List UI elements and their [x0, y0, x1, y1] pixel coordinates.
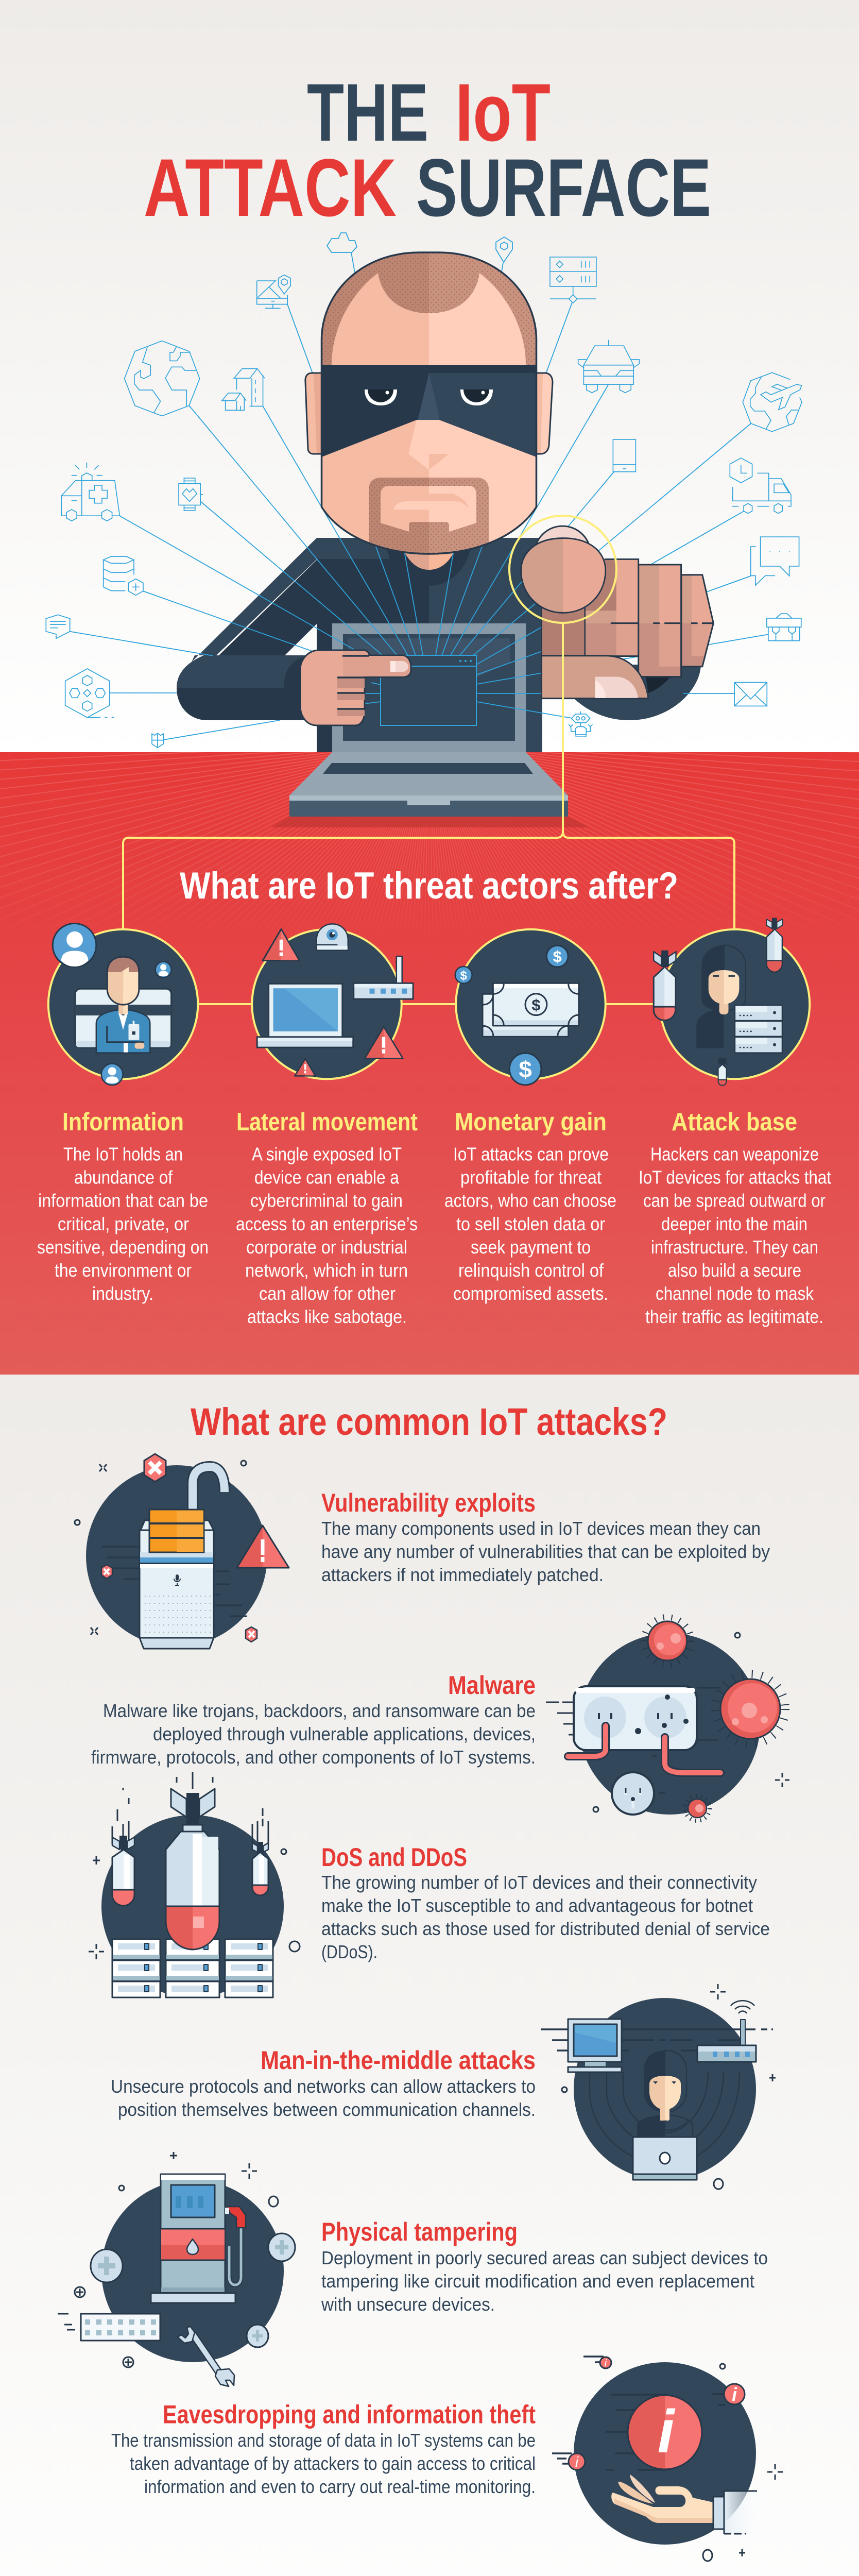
icon: wrench — [178, 2327, 234, 2386]
icon: tablet — [613, 439, 635, 472]
text block: DoS and DDoS: attacks such as those used for distributed denial of service — [321, 1918, 770, 1939]
icon: globe with plane — [743, 372, 802, 432]
circle: monetary gain: $ — [519, 1056, 532, 1082]
text block: monetary gain: Monetary gain — [455, 1108, 607, 1136]
text block: eavesdropping — [111, 2400, 536, 2497]
title: SURFACE — [416, 142, 711, 233]
bottom background — [0, 1375, 859, 2576]
text block: vulnerability exploits: Vulnerability exploits — [321, 1488, 536, 1517]
hacker torso and left arm — [177, 538, 542, 752]
icon: game controller hexagon — [65, 669, 114, 718]
icon: envelope — [734, 683, 767, 706]
icon: physical tampering fuel pump — [58, 2152, 295, 2386]
left hand on laptop — [300, 650, 411, 725]
icon: eavesdropping info hand — [552, 2357, 783, 2561]
text block: eavesdropping: taken advantage of by attackers to gain access to critical — [130, 2453, 536, 2474]
icon: eavesdropping info hand: i — [658, 2398, 676, 2466]
right arm — [575, 665, 701, 720]
icon: malware power strip with germs — [546, 1617, 789, 1821]
icon: chat bubbles — [751, 537, 799, 585]
circle: monetary gain: $ — [553, 947, 562, 965]
text block: monetary gain: IoT attacks can prove — [453, 1144, 609, 1164]
text block: man in the middle — [111, 2046, 536, 2120]
text block: monetary gain: compromised assets. — [453, 1283, 608, 1304]
nose shading — [408, 420, 449, 470]
text block: lateral movement: Lateral movement — [236, 1108, 418, 1136]
icon: robot — [569, 711, 592, 737]
icon: message bubble — [46, 615, 70, 638]
title — [144, 66, 711, 233]
text block: attack base: infrastructure. They can — [651, 1236, 818, 1258]
text block: attack base: deeper into the main — [661, 1213, 808, 1234]
text block: information: critical, private, or — [58, 1213, 189, 1234]
text block: man in the middle: position themselves between communication channels. — [118, 2099, 536, 2120]
icons right lower — [569, 537, 801, 737]
goatee — [369, 478, 489, 553]
text block: DoS and DDoS: The growing number of IoT devices and their connectivity — [321, 1872, 757, 1893]
laptop window — [381, 655, 476, 725]
icon: location pin — [496, 237, 512, 262]
title: ATTACK — [144, 142, 397, 233]
text block: physical tampering: Physical tampering — [321, 2217, 518, 2246]
yellow highlight circle and connector — [123, 516, 735, 1004]
threat actor goals text — [37, 1108, 831, 1327]
circle: monetary gain — [455, 929, 606, 1085]
text block: monetary gain: profitable for threat — [460, 1166, 602, 1188]
icon: cloud — [327, 233, 357, 252]
text block: monetary gain: relinquish control of — [458, 1260, 604, 1281]
text block: attack base: their traffic as legitimate. — [645, 1306, 823, 1327]
text block: vulnerability exploits — [321, 1488, 770, 1585]
icon: server — [550, 257, 596, 303]
text block: eavesdropping: Eavesdropping and information theft — [163, 2400, 536, 2429]
circle: attack base — [654, 918, 810, 1086]
connection lines from icons to laptop — [70, 252, 768, 740]
text block: malware — [91, 1671, 536, 1768]
text block: lateral movement: access to an enterprise’s — [236, 1213, 418, 1234]
icon: eavesdropping info hand: i — [575, 2454, 579, 2470]
text block: lateral movement: device can enable a — [254, 1166, 400, 1188]
icon: eavesdropping info hand: i — [605, 2358, 607, 2369]
top background — [0, 0, 859, 752]
text block: man in the middle: Man-in-the-middle attacks — [261, 2046, 536, 2075]
text block: information: industry. — [92, 1283, 153, 1304]
text block: monetary gain — [444, 1108, 616, 1304]
text block: attack base — [639, 1108, 831, 1327]
text block: monetary gain: actors, who can choose — [444, 1190, 616, 1211]
text block: lateral movement: cybercriminal to gain — [250, 1190, 403, 1211]
text block: vulnerability exploits: attackers if not immediately patched. — [321, 1564, 604, 1585]
text block: information: sensitive, depending on — [37, 1236, 209, 1258]
icon: vulnerability exploits speaker with padlock — [75, 1454, 289, 1649]
hacker head — [305, 252, 553, 562]
icon: delivery truck — [730, 458, 791, 513]
icon: ambulance — [61, 463, 119, 521]
text block: information: the environment or — [55, 1260, 192, 1281]
panel: threat icons — [48, 923, 413, 1085]
text block: attack base: channel node to mask — [656, 1283, 814, 1304]
icon: car — [578, 340, 639, 393]
icon: globe — [125, 341, 200, 416]
icons left top — [61, 275, 290, 521]
text block: lateral movement: can allow for other — [259, 1283, 396, 1304]
text block: information: information that can be — [38, 1190, 208, 1211]
icon: monitor with pin — [257, 275, 290, 308]
text block: vulnerability exploits: The many components used in IoT devices mean they can — [321, 1518, 761, 1539]
text block: attack base: IoT devices for attacks that — [639, 1166, 831, 1188]
text block: information: Information — [62, 1108, 184, 1136]
text block: malware: Malware like trojans, backdoors, and ransomware can be — [103, 1700, 536, 1721]
laptop base — [270, 752, 589, 827]
heading: threat actors: What are IoT threat actors after? — [180, 865, 678, 907]
server rack — [112, 1906, 273, 1997]
text block: eavesdropping: The transmission and storage of data in IoT systems can be — [111, 2430, 536, 2451]
text block: information: The IoT holds an — [63, 1144, 183, 1164]
icon: man in the middle hacker — [541, 1984, 776, 2189]
icon: smartwatch — [179, 478, 203, 511]
title: THE — [307, 66, 428, 158]
icon: houses — [222, 369, 265, 410]
circle: lateral movement — [252, 924, 413, 1079]
text block: lateral movement: network, which in turn — [245, 1260, 408, 1281]
text block: man in the middle: Unsecure protocols and networks can allow attackers to — [111, 2076, 536, 2097]
circle: monetary gain: $ — [531, 996, 541, 1014]
text block: physical tampering — [321, 2217, 768, 2315]
icons right top — [550, 257, 802, 513]
text block: DoS and DDoS: (DDoS). — [321, 1941, 377, 1962]
text block: lateral movement: A single exposed IoT — [252, 1144, 402, 1164]
right ear — [536, 373, 553, 454]
text block: eavesdropping: information and even to carry out real-time monitoring. — [144, 2476, 536, 2497]
icon: briefcase — [767, 614, 801, 641]
text block: monetary gain: seek payment to — [471, 1236, 591, 1258]
left ear — [305, 373, 322, 454]
text block: attack base: Attack base — [672, 1108, 797, 1136]
text block: attack base: Hackers can weaponize — [650, 1144, 819, 1164]
heading: common attacks: What are common IoT attacks? — [191, 1400, 667, 1443]
icon: eavesdropping info hand: i — [732, 2384, 737, 2405]
text block: attack base: can be spread outward or — [643, 1190, 826, 1211]
text block: physical tampering: tampering like circuit modification and even replacement — [321, 2270, 754, 2292]
text block: physical tampering: Deployment in poorly secured areas can subject devices to — [321, 2247, 768, 2268]
right hand pointing — [521, 526, 713, 720]
circle: information — [48, 923, 198, 1085]
text block: lateral movement — [236, 1108, 418, 1327]
text block: vulnerability exploits: have any number of vulnerabilities that can be exploited by — [321, 1541, 770, 1562]
text block: physical tampering: with unsecure devices. — [321, 2294, 495, 2315]
eyes — [365, 389, 493, 405]
text block: DoS and DDoS: DoS and DDoS — [321, 1843, 467, 1872]
icon: database — [104, 556, 143, 595]
laptop screen — [332, 623, 526, 752]
text block: malware: firmware, protocols, and other components of IoT systems. — [91, 1747, 536, 1768]
mask — [321, 365, 537, 457]
text block: attack base: also build a secure — [668, 1260, 801, 1281]
icons left lower — [46, 556, 163, 748]
text block: information: abundance of — [74, 1166, 173, 1188]
text block: malware: deployed through vulnerable applications, devices, — [153, 1723, 536, 1744]
circle: monetary gain: $ — [460, 969, 467, 982]
text block: lateral movement: attacks like sabotage. — [247, 1306, 407, 1327]
text block: DoS and DDoS — [321, 1843, 770, 1962]
icon: DoS bombs over servers — [89, 1772, 300, 1997]
text block: lateral movement: corporate or industrial — [246, 1236, 407, 1258]
text block: monetary gain: to sell stolen data or — [456, 1213, 605, 1234]
icon: shield — [152, 733, 163, 748]
red panel background — [0, 752, 859, 1375]
hair — [321, 252, 537, 365]
text block: DoS and DDoS: make the IoT susceptible to and advantageous for botnet — [321, 1895, 753, 1916]
text block: malware: Malware — [448, 1671, 536, 1700]
title: IoT — [455, 66, 551, 158]
text block: information — [37, 1108, 209, 1304]
